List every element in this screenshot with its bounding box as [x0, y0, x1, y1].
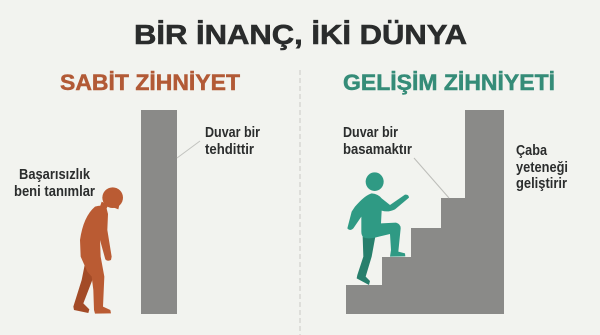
- panel: growth mindset: [343, 110, 568, 314]
- label: effort develops ability: geliştirir: [516, 176, 567, 192]
- title: BİR İNANÇ, İKİ DÜNYA: [134, 19, 467, 50]
- label: effort develops ability: Çaba: [516, 143, 548, 159]
- heading: fixed mindset: SABİT ZİHNİYET: [60, 70, 241, 95]
- label: wall is a step: Duvar bir: [343, 125, 398, 141]
- label: effort develops ability: yeteneği: [516, 160, 568, 176]
- label: failure defines me: Başarısızlık: [19, 167, 91, 183]
- stairs: [346, 110, 504, 314]
- label: failure defines me: beni tanımlar: [14, 184, 95, 200]
- label: wall is a threat: tehdittir: [205, 142, 254, 158]
- wall: [141, 110, 177, 314]
- leader line: step: [414, 158, 449, 198]
- label: wall is a step: basamaktır: [343, 142, 412, 158]
- icon: slumped person: [73, 187, 123, 314]
- panel: fixed mindset: [14, 110, 260, 314]
- heading: growth mindset: GELİŞİM ZİHNİYETİ: [343, 70, 555, 95]
- leader line: wall: [177, 141, 200, 158]
- label: wall is a threat: Duvar bir: [205, 125, 260, 141]
- icon: climbing person: [347, 172, 409, 285]
